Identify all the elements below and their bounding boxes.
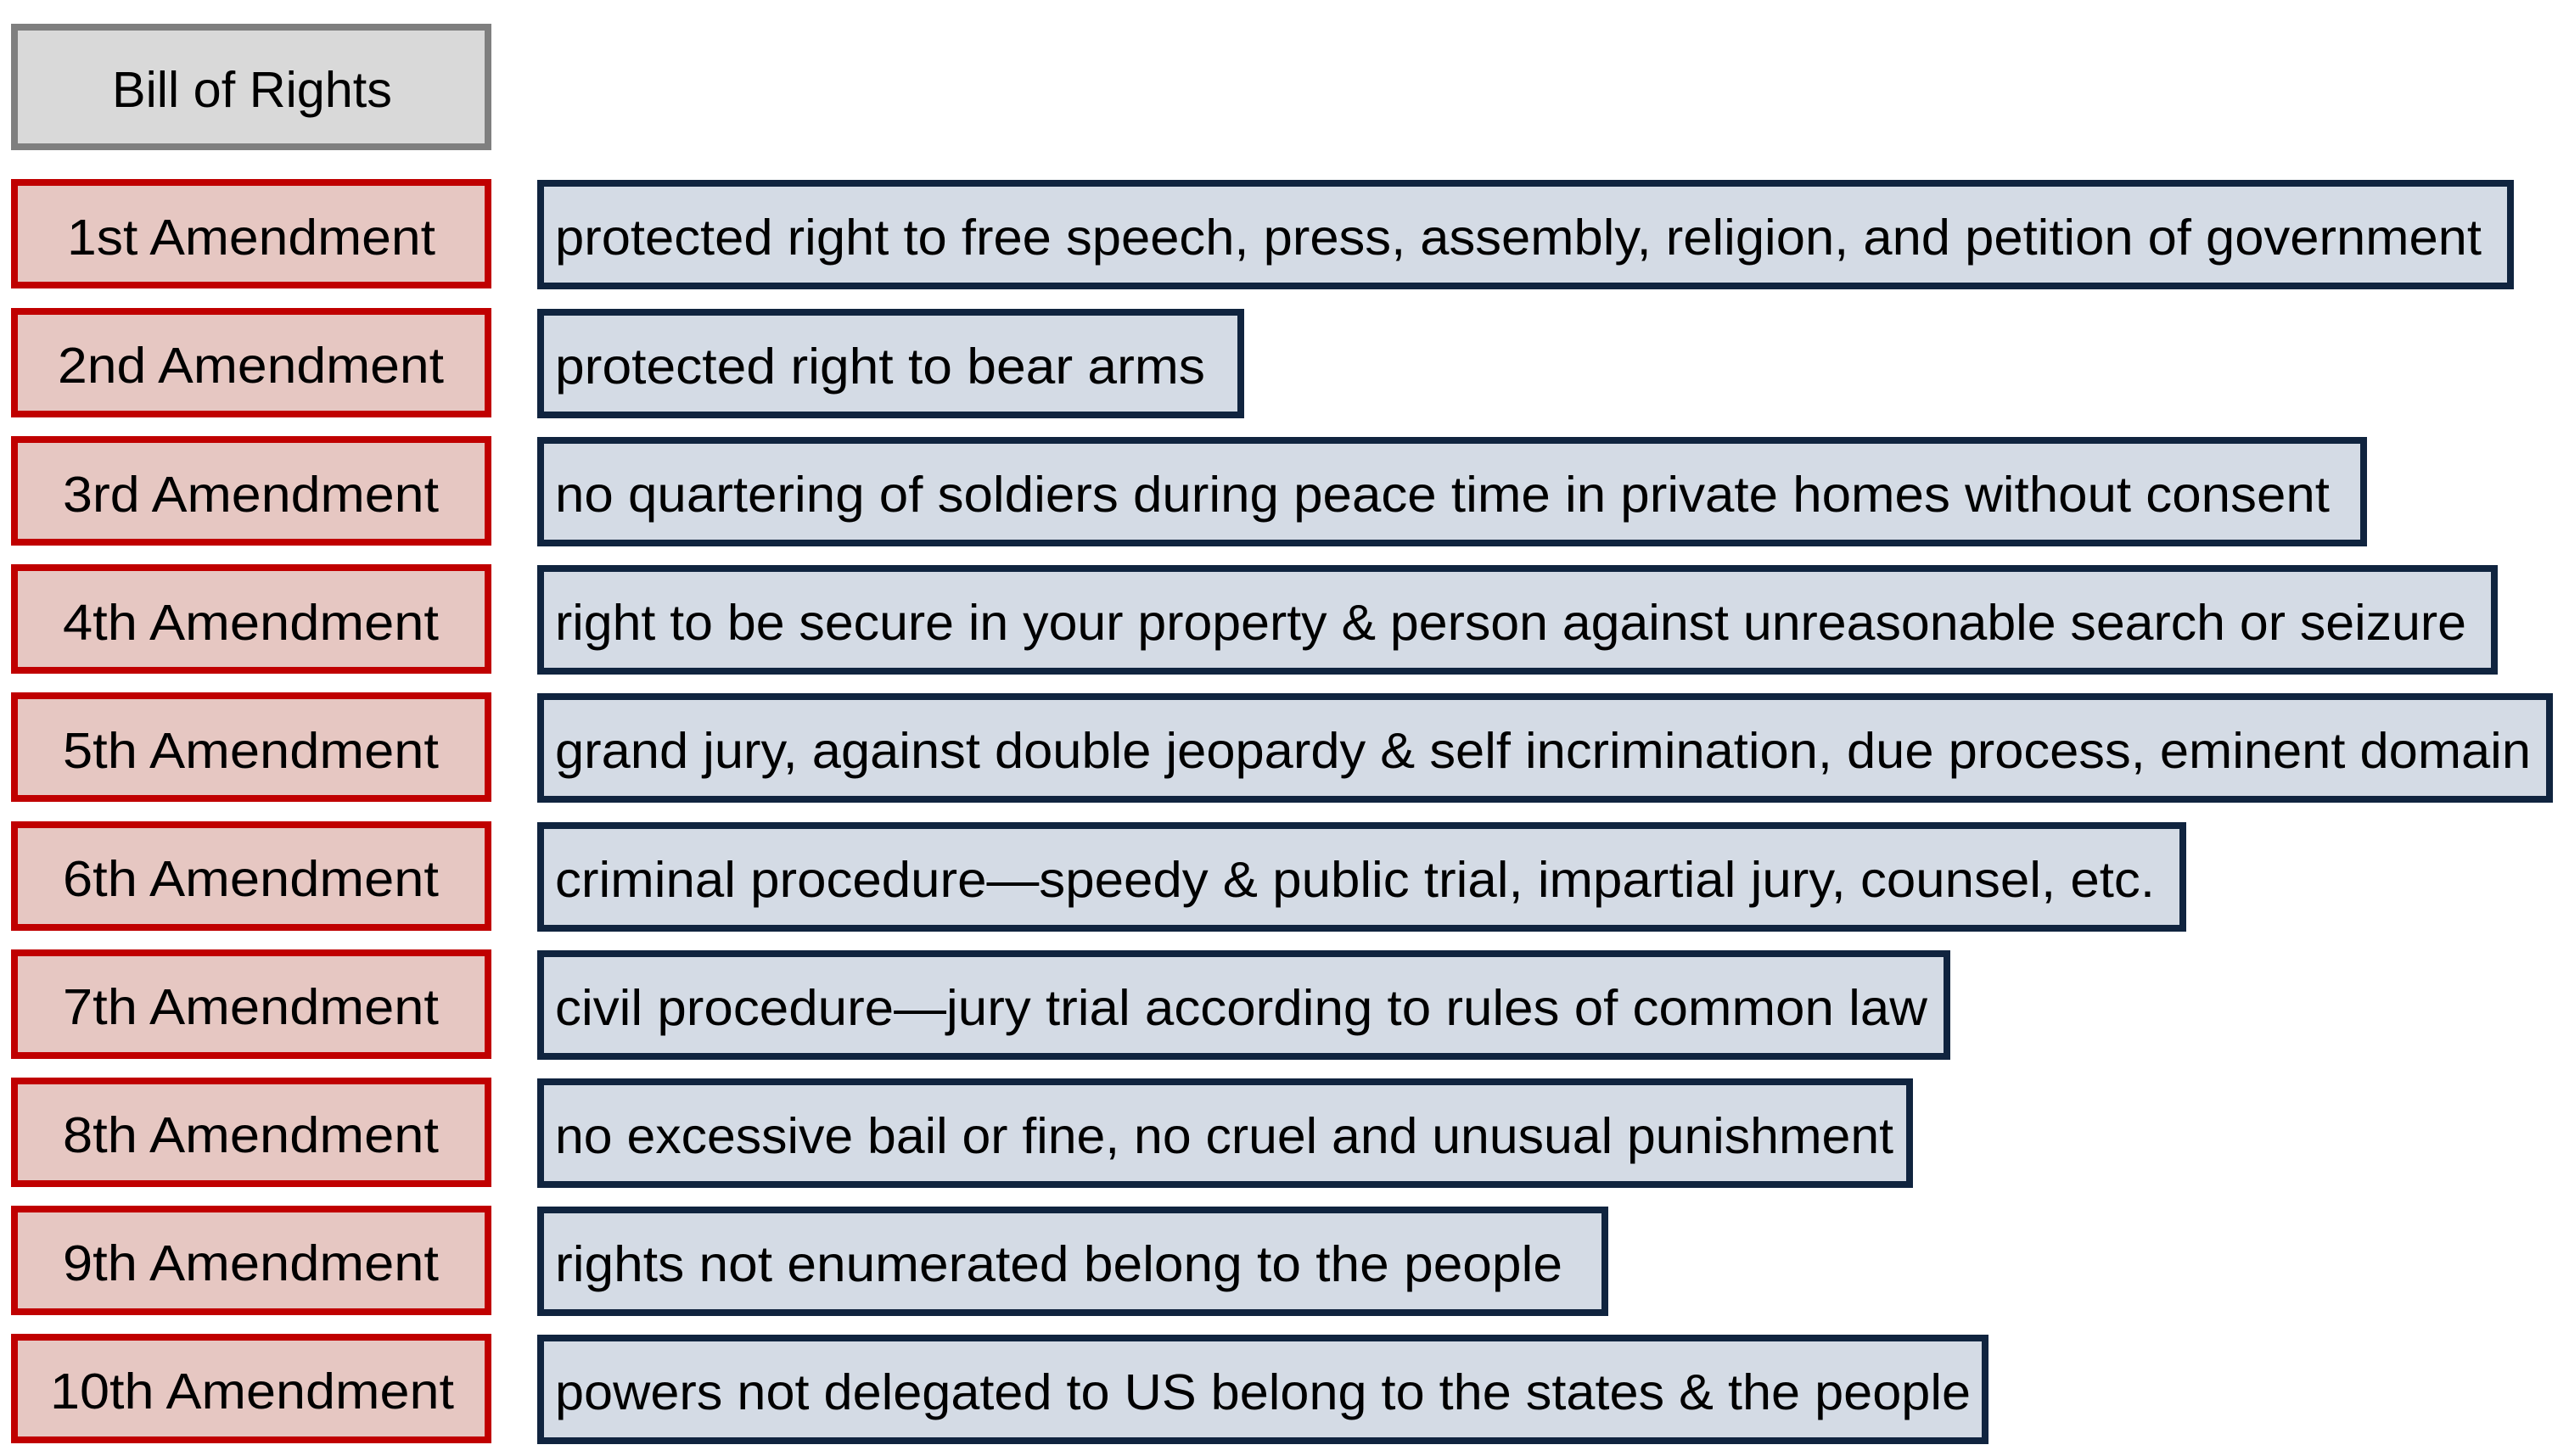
- row: 9th Amendment: [14, 1209, 488, 1312]
- description: 8th Amendment: [541, 1082, 1910, 1184]
- title box: Bill of Rights: Bill of Rights: [112, 62, 392, 118]
- description: 10th Amendment: powers not delegated to US belong to the states & the people: [555, 1364, 1971, 1420]
- row: 8th Amendment: [14, 1081, 488, 1184]
- description: 2nd Amendment: [541, 312, 1241, 415]
- row: 9th Amendment: 9th Amendment: [63, 1235, 439, 1291]
- description: 5th Amendment: [541, 697, 2549, 799]
- row: 10th Amendment: [14, 1337, 488, 1440]
- row: 3rd Amendment: [14, 440, 488, 542]
- description: 9th Amendment: rights not enumerated belong to the people: [555, 1236, 1562, 1292]
- row: 4th Amendment: 4th Amendment: [63, 595, 439, 651]
- description: 4th Amendment: right to be secure in your property & person against unreasonable search or seizure: [555, 595, 2466, 651]
- description: 3rd Amendment: [541, 440, 2364, 543]
- description: 7th Amendment: civil procedure—jury trial according to rules of common law: [555, 980, 1927, 1036]
- row: 6th Amendment: 6th Amendment: [63, 851, 439, 907]
- row: 5th Amendment: 5th Amendment: [63, 723, 439, 779]
- row: 6th Amendment: [14, 825, 488, 927]
- title box: Bill of Rights: [14, 27, 488, 147]
- row: 4th Amendment: [14, 568, 488, 670]
- row: 10th Amendment: 10th Amendment: [50, 1364, 454, 1420]
- row: 3rd Amendment: 3rd Amendment: [63, 467, 439, 523]
- description: 1st Amendment: [541, 183, 2510, 286]
- row: 8th Amendment: 8th Amendment: [63, 1107, 439, 1163]
- description: 1st Amendment: protected right to free speech, press, assembly, religion, and petition of government: [555, 210, 2482, 266]
- description: 10th Amendment: [541, 1338, 1985, 1441]
- row: 1st Amendment: [14, 182, 488, 285]
- description: 4th Amendment: [541, 568, 2494, 671]
- row: 7th Amendment: [14, 953, 488, 1056]
- row: 2nd Amendment: 2nd Amendment: [58, 338, 444, 394]
- description: 9th Amendment: [541, 1210, 1605, 1313]
- description: 3rd Amendment: no quartering of soldiers during peace time in private homes without consent: [555, 467, 2330, 523]
- row: 5th Amendment: [14, 696, 488, 798]
- description: 7th Amendment: [541, 954, 1947, 1056]
- description: 8th Amendment: no excessive bail or fine, no cruel and unusual punishment: [555, 1108, 1893, 1164]
- row: 2nd Amendment: [14, 311, 488, 414]
- row: 1st Amendment: 1st Amendment: [67, 210, 435, 266]
- row: 7th Amendment: 7th Amendment: [63, 979, 439, 1035]
- description: 6th Amendment: [541, 826, 2183, 928]
- description: 6th Amendment: criminal procedure—speedy & public trial, impartial jury, counsel, etc.: [555, 852, 2155, 908]
- description: 2nd Amendment: protected right to bear arms: [555, 339, 1205, 395]
- description: 5th Amendment: grand jury, against double jeopardy & self incrimination, due process, eminent domain: [555, 723, 2531, 779]
